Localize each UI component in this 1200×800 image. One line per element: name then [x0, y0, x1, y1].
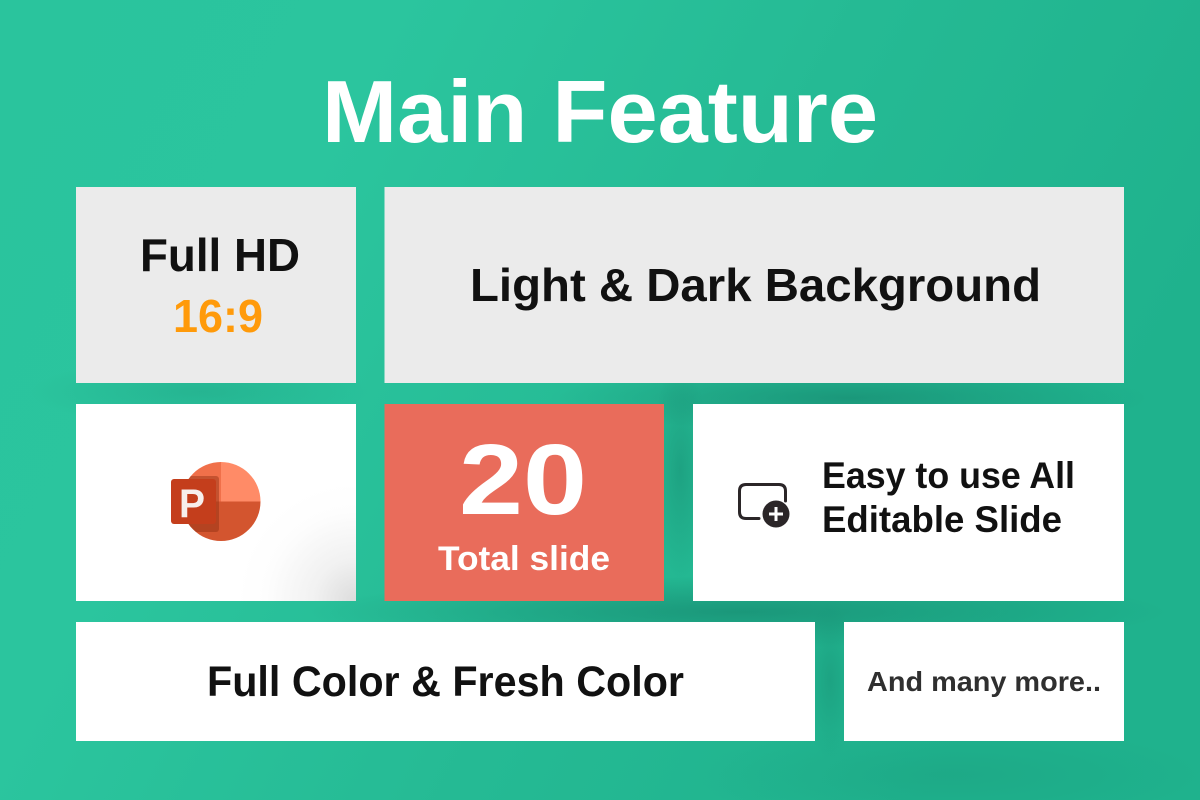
- panel: 20 Total slide: [384, 404, 664, 601]
- panel: PowerPoint logo: [76, 404, 356, 601]
- text: And many more: And many more..: [867, 666, 1101, 697]
- title: Main Feature: [322, 62, 878, 161]
- text: aspect ratio: 16:9: [173, 290, 263, 342]
- text: Easy to use All Editable Slide: Easy to use All: [822, 455, 1075, 496]
- heading: Full Color and Fresh Color: Full Color & Fresh Color: [207, 658, 684, 706]
- panel: Full HD 16:9: [76, 187, 356, 383]
- text: Easy to use All Editable Slide: [822, 455, 1075, 540]
- heading: Full HD: Full HD: [140, 229, 300, 281]
- panel: Easy to use: [693, 404, 1124, 601]
- label: Total slide: Total slide: [438, 540, 610, 578]
- panel: Full Color: [76, 622, 815, 741]
- text: Easy to use All Editable Slide: Editable Slide: [822, 499, 1062, 540]
- icon: add slide: [740, 484, 790, 528]
- number: 20: 20: [459, 424, 587, 536]
- icon: PowerPoint: P: [179, 482, 205, 526]
- panel: And many more: [844, 622, 1124, 741]
- icon: PowerPoint: [171, 461, 262, 542]
- heading: Light and Dark Background: Light & Dark Background: [470, 259, 1041, 311]
- panel: Light and Dark Background: [384, 187, 1124, 383]
